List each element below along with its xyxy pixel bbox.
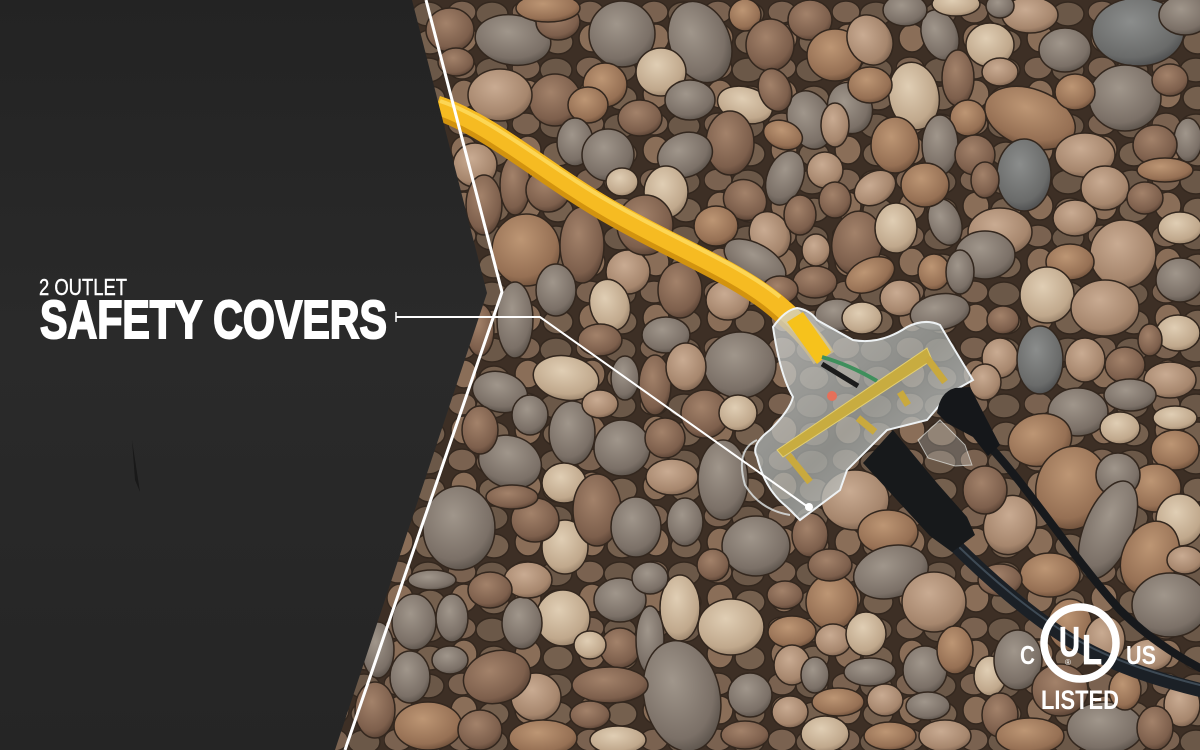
UL listed certification mark: US xyxy=(1126,640,1156,670)
UL listed certification mark: ® xyxy=(1065,658,1071,667)
UL listed certification mark: C xyxy=(1020,640,1035,670)
clear outlet plug housing xyxy=(742,308,973,520)
black plug xyxy=(863,430,975,552)
gold contact bar xyxy=(777,348,932,457)
UL listed certification mark: LISTED xyxy=(1041,685,1119,715)
leader line from heading to plug xyxy=(396,312,813,511)
green wire xyxy=(822,357,877,381)
UL listed certification mark xyxy=(1020,607,1156,715)
white chevron outline xyxy=(345,0,502,750)
outlet flap loop xyxy=(742,440,790,515)
background: gravel stones xyxy=(330,0,1200,750)
heading line: 2 outlet: 2 OUTLET xyxy=(39,274,127,300)
yellow cord end inside housing xyxy=(787,312,831,364)
UL listed certification mark: U xyxy=(1059,618,1080,665)
UL listed certification mark: L xyxy=(1082,626,1102,673)
yellow extension cord xyxy=(437,101,824,358)
second black plug xyxy=(937,387,1000,456)
black wire and bulb xyxy=(822,364,858,386)
heading xyxy=(39,274,387,350)
dark panel xyxy=(0,0,487,750)
black power cords xyxy=(955,450,1200,690)
heading line: safety covers: SAFETY COVERS xyxy=(40,290,387,350)
plug cover cap xyxy=(918,420,972,466)
